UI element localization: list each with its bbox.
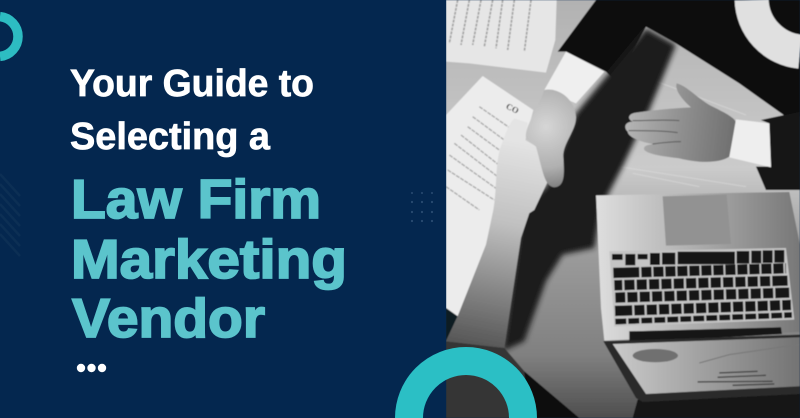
woman's hand and forearm bbox=[446, 118, 548, 348]
heading: white intro lines: Your Guide to bbox=[70, 63, 314, 105]
document left contract bbox=[446, 76, 533, 316]
arm and table corner below bbox=[446, 341, 528, 418]
suited hand in handshake bbox=[526, 90, 576, 187]
laptop trackpad bbox=[663, 195, 731, 246]
white cuff right arm bbox=[729, 119, 771, 167]
document left contract: CO bbox=[504, 101, 521, 116]
laptop screen with chart bbox=[613, 337, 800, 394]
flat hand on table bbox=[625, 83, 736, 162]
decorative faint dot grid bbox=[411, 192, 433, 222]
table surface bbox=[446, 0, 800, 418]
icon: three white dots bbox=[77, 364, 106, 372]
icon: teal ring bottom center bbox=[409, 361, 523, 418]
heading: teal main title: Law Firm bbox=[71, 168, 321, 230]
icon: teal ring top left bbox=[0, 17, 18, 56]
heading: white intro lines: Selecting a bbox=[70, 116, 271, 158]
panel: navy title background bbox=[0, 0, 446, 418]
under laptop dark area bbox=[633, 393, 800, 418]
white cuff left arm bbox=[544, 52, 604, 103]
photo scene bbox=[446, 0, 800, 418]
decorative faint diagonal stripes bbox=[0, 174, 20, 256]
laptop screen bezel bbox=[603, 335, 800, 402]
dark gap under contract bbox=[446, 308, 458, 341]
lower scene bbox=[446, 192, 800, 418]
dark corner bottom bbox=[524, 371, 579, 418]
right sleeve bbox=[756, 112, 800, 190]
heading: white intro lines bbox=[70, 63, 314, 158]
laptop lid base bbox=[596, 192, 800, 341]
heading: teal main title: Marketing bbox=[71, 228, 347, 290]
dark suit sleeves bbox=[558, 0, 800, 117]
white translucent ring bbox=[752, 0, 800, 52]
cast shadow across table bbox=[503, 28, 676, 351]
laptop keyboard bbox=[609, 248, 794, 327]
heading: teal main title: Vendor bbox=[72, 287, 265, 349]
table wood streaks bbox=[648, 84, 746, 187]
panel: handshake photo bbox=[446, 0, 800, 418]
document top left bbox=[446, 0, 557, 73]
heading: teal main title bbox=[71, 168, 347, 349]
laptop hinge bbox=[629, 327, 782, 343]
